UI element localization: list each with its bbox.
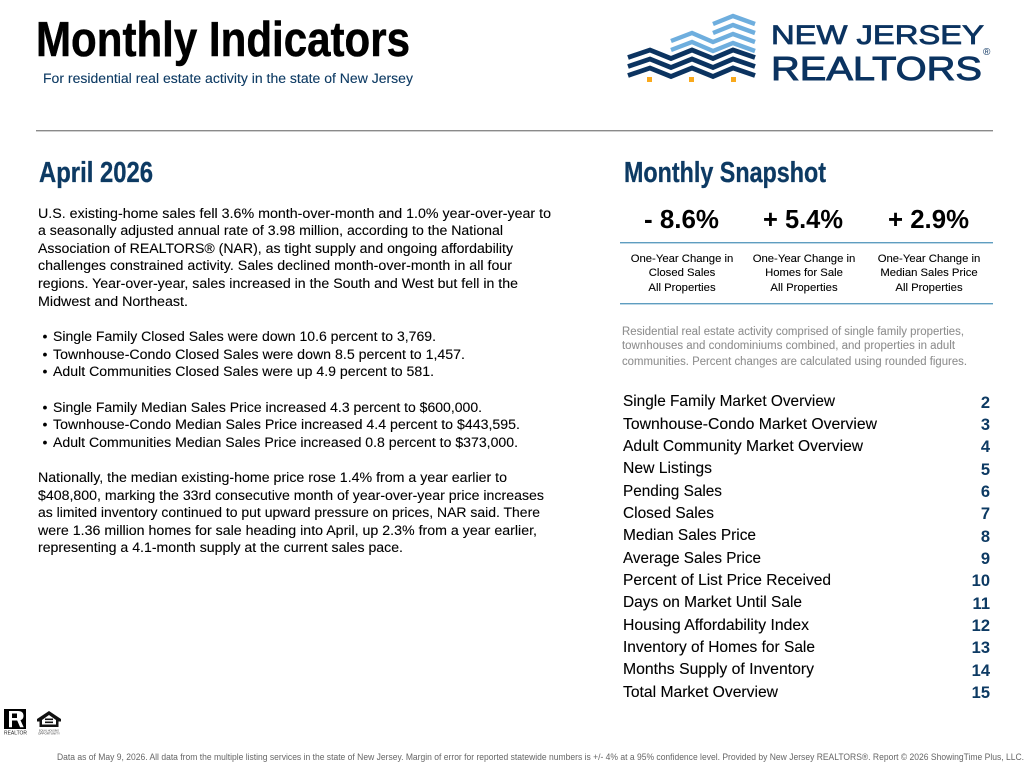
stat: homes for sale: + 5.4% [763, 206, 843, 234]
text block: national paragraph: Nationally, the median existing-home price rose 1.4% from a year earlier to [38, 469, 507, 485]
panel: snapshot statistics [620, 206, 993, 304]
text block: intro paragraph: Association of REALTORS® (NAR), as tight supply and ongoing affordability [38, 240, 514, 256]
table of contents: Housing Affordability Index [623, 617, 809, 634]
stat label: homes for sale [753, 253, 855, 294]
stat label: median sales price: All Properties [895, 282, 963, 294]
icon: light blue buildings [671, 16, 755, 51]
text block: closed sales bullets: Townhouse-Condo Closed Sales were down 8.5 percent to 1,457. [53, 346, 465, 362]
table of contents: 5 [981, 461, 990, 479]
text block: national paragraph: representing a 4.1-month supply at the current sales pace. [38, 539, 403, 555]
text block: national paragraph: $408,800, marking the 33rd consecutive month of year-over-year price increases [38, 487, 544, 503]
stat: median sales price: + 2.9% [888, 206, 969, 234]
table of contents: 14 [972, 662, 991, 680]
icon: equal housing opportunity: EQUAL HOUSING [39, 728, 59, 732]
table of contents: Single Family Market Overview [623, 393, 836, 410]
table of contents: Inventory of Homes for Sale [623, 639, 815, 656]
text block: median price bullets: • [42, 399, 48, 415]
heading: April 2026: April 2026 [39, 157, 153, 189]
text block: closed sales bullets: • [42, 363, 48, 379]
table of contents: 2 [981, 394, 990, 412]
title: Monthly Indicators [36, 13, 410, 67]
table of contents: 15 [972, 684, 990, 702]
logo text: New Jersey: NEW JERSEY [771, 20, 984, 50]
stat label: median sales price: Median Sales Price [880, 267, 978, 279]
text block: median price bullets: • [42, 434, 48, 450]
stat label: homes for sale: All Properties [770, 282, 838, 294]
table of contents: Months Supply of Inventory [623, 661, 814, 678]
stat label: median sales price [878, 253, 980, 294]
text block: closed sales bullets: • [42, 346, 48, 362]
icon: Realtor logo [4, 709, 27, 736]
stat label: closed sales [631, 253, 733, 294]
text block: grey methodology note: townhouses and condominiums combined, and properties in adult [622, 340, 956, 352]
table of contents: 13 [972, 639, 990, 657]
table of contents: 4 [981, 438, 991, 456]
icon: equal housing opportunity: OPPORTUNITY [38, 732, 60, 736]
table of contents: 7 [981, 505, 990, 523]
table of contents: 11 [973, 595, 990, 613]
logo: New Jersey Realtors [628, 16, 991, 87]
table of contents: New Listings [623, 460, 712, 477]
stat label: homes for sale: Homes for Sale [765, 267, 843, 279]
table of contents: Percent of List Price Received [623, 572, 831, 589]
logo text: Realtors: REALTORS [771, 50, 982, 87]
text block: national paragraph [37, 469, 544, 555]
table of contents: 9 [981, 550, 990, 568]
text block: national paragraph: as limited inventory continued to put upward pressure on prices, NAR said. There [38, 504, 540, 520]
text block: median price bullets: Townhouse-Condo Median Sales Price increased 4.4 percent to $443,595. [53, 416, 520, 432]
text block: median price bullets: • [42, 416, 48, 432]
table of contents: Adult Community Market Overview [623, 438, 864, 455]
table of contents [623, 393, 991, 702]
logo registered mark: ® [983, 47, 991, 58]
table of contents: Total Market Overview [623, 684, 779, 701]
table of contents: Townhouse-Condo Market Overview [623, 416, 878, 433]
text block: median price bullets: Single Family Median Sales Price increased 4.3 percent to $600,000. [53, 399, 482, 415]
table of contents: Pending Sales [623, 483, 722, 500]
text block: intro paragraph: Midwest and Northeast. [38, 293, 188, 309]
table of contents: 12 [972, 617, 990, 635]
heading: Monthly Snapshot: Monthly Snapshot [624, 157, 826, 189]
stat label: closed sales: One-Year Change in [631, 253, 733, 265]
table of contents: Days on Market Until Sale [623, 594, 802, 611]
text block: intro paragraph: U.S. existing-home sales fell 3.6% month-over-month and 1.0% year-over-year to [38, 205, 551, 221]
text block: closed sales bullets: Adult Communities Closed Sales were up 4.9 percent to 581. [53, 363, 434, 379]
text block: grey methodology note [622, 326, 967, 368]
table of contents: Median Sales Price [623, 527, 756, 544]
text block: closed sales bullets [42, 328, 465, 379]
text block: intro paragraph: regions. Year-over-year, sales increased in the South and West but fell in the [38, 275, 518, 291]
text block: intro paragraph: a seasonally adjusted annual rate of 3.98 million, according to the National [38, 222, 503, 238]
footer disclaimer: Data as of May 9, 2026. All data from the multiple listing services in the state of New Jersey. Margin of error for reported statewide numbers is +/- 4% at a 95% confidence level. Provided by New Jersey REALTORS®. Report © 2026 ShowingTime Plus, LLC. [57, 752, 1024, 762]
subtitle: For residential real estate activity in the state of New Jersey [43, 70, 414, 86]
stat label: homes for sale: One-Year Change in [753, 253, 855, 265]
stat label: closed sales: Closed Sales [649, 267, 716, 279]
stat label: closed sales: All Properties [648, 282, 716, 294]
text block: intro paragraph [38, 205, 551, 309]
icon: orange squares [647, 77, 736, 82]
stat label: median sales price: One-Year Change in [878, 253, 980, 265]
text block: national paragraph: were 1.36 million homes for sale heading into April, up 2.3% from a year earlier, [37, 522, 537, 538]
text block: grey methodology note: communities. Percent changes are calculated using rounded figures. [622, 356, 967, 368]
table of contents: 10 [972, 572, 990, 590]
icon: dark blue zigzag skyline [628, 50, 755, 76]
stat: closed sales: - 8.6% [644, 206, 719, 234]
text block: intro paragraph: challenges constrained activity. Sales declined month-over-month in all four [38, 257, 512, 273]
table of contents: Average Sales Price [623, 550, 761, 567]
text block: grey methodology note: Residential real estate activity comprised of single family properties, [622, 326, 964, 338]
icon: Realtor logo: REALTOR [4, 730, 27, 736]
text block: closed sales bullets: • [42, 328, 48, 344]
text block: closed sales bullets: Single Family Closed Sales were down 10.6 percent to 3,769. [53, 328, 436, 344]
icon: equal housing opportunity [37, 711, 61, 736]
table of contents: 8 [981, 528, 990, 546]
table of contents: Closed Sales [623, 505, 714, 522]
table of contents: 6 [981, 483, 990, 501]
text block: median price bullets [42, 399, 520, 450]
table of contents: 3 [981, 416, 990, 434]
text block: median price bullets: Adult Communities Median Sales Price increased 0.8 percent to $373,000. [53, 434, 518, 450]
